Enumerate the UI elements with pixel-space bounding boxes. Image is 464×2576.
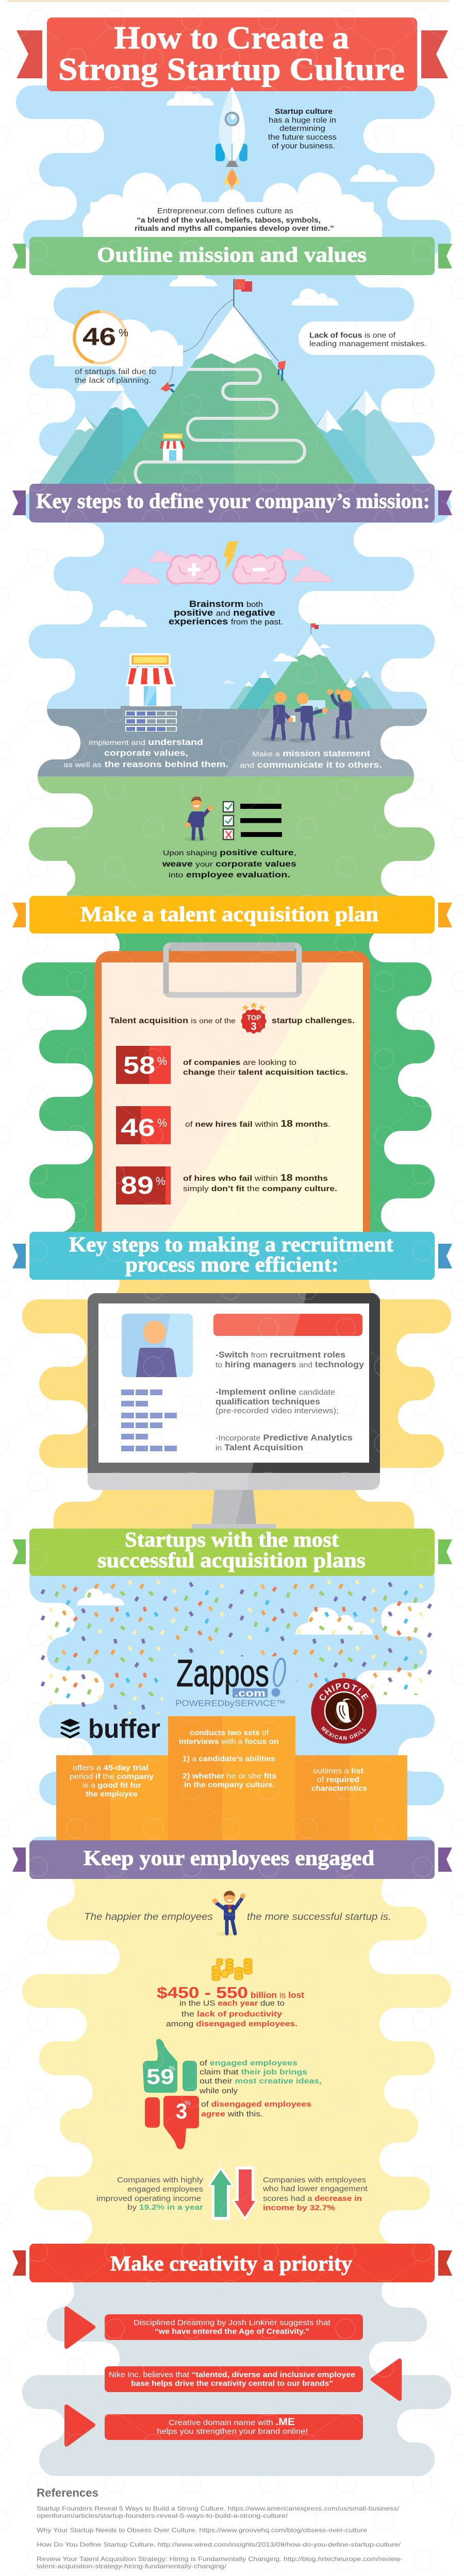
logo: Chipotle: MEXICAN GRILL bbox=[321, 1726, 366, 1740]
text: corporate values: corporate values, bbox=[104, 749, 188, 758]
panel: ground band bbox=[0, 709, 464, 793]
text: recruitment steps: -Implement online candidate bbox=[216, 1387, 335, 1397]
podium: buffer: the employee bbox=[86, 1790, 138, 1799]
callout: disciplined dreaming: “we have entered the Age of Creativity.” bbox=[155, 2327, 309, 2336]
text: employee evaluation: weave your corporate values bbox=[162, 860, 296, 869]
panel: key steps banner: Key steps to define your company’s mission: bbox=[36, 489, 430, 513]
podium: buffer bbox=[56, 1755, 168, 1843]
text: culture definition: Entrepreneur.com defines culture as bbox=[157, 207, 293, 215]
text: engaged employees bbox=[199, 2059, 322, 2095]
references heading: References bbox=[37, 2486, 98, 2499]
callout: disciplined dreaming: Disciplined Dreaming by Josh Linkner suggests that bbox=[134, 2318, 331, 2327]
text: startup culture role: determining bbox=[279, 124, 325, 133]
small clouds in sky bbox=[100, 89, 397, 627]
text: decrease in income: scores had a decrease in bbox=[263, 2194, 362, 2203]
panel: green talent background bbox=[0, 929, 464, 1232]
icon: thumbs up 59 percent: % bbox=[169, 2064, 175, 2072]
references list: talent-acquisition-strategy-hiring-fundamentally-changing/ bbox=[37, 2563, 227, 2570]
icon: thumbs down 3 percent bbox=[145, 2096, 199, 2149]
panel: cream engagement background bbox=[0, 1873, 464, 2246]
panel: outline mission banner: Outline mission and values bbox=[97, 243, 367, 266]
references list: Why Your Startup Needs to Obsess Over Culture. https://www.groovehq.com/blog/obsess-over-culture bbox=[37, 2527, 367, 2534]
clipboard clip bbox=[163, 942, 302, 995]
stat: 89 percent: % bbox=[156, 1175, 165, 1188]
text: engaged employees: of engaged employees bbox=[200, 2059, 297, 2067]
text: recruitment steps: in Talent Acquisition bbox=[216, 1443, 303, 1452]
podium: zappos: 2) whether he or she fits bbox=[183, 1772, 276, 1781]
text: mission statement: Make a mission statement bbox=[252, 749, 371, 758]
panel: talent banner bbox=[12, 896, 452, 934]
stat: billions lost: in the US each year due to bbox=[179, 1999, 285, 2008]
stat: 46 percent hires: % bbox=[157, 1116, 167, 1129]
stat: billions lost bbox=[157, 1984, 304, 2028]
arrow: third pointer bbox=[67, 2406, 93, 2445]
stat: billions lost: among disengaged employees. bbox=[166, 2020, 297, 2028]
stat: 58 percent: change their talent acquisition tactics. bbox=[183, 1068, 348, 1077]
clipboard frame bbox=[95, 951, 370, 1236]
stat: billions lost: $450 - 550 bbox=[157, 1984, 248, 2002]
text: culture definition: rituals and myths all companies develop over time.” bbox=[135, 225, 334, 233]
panel: sky background, intro to key steps bbox=[0, 86, 464, 726]
text: improved operating income bbox=[96, 2176, 204, 2212]
panel: engaged banner bbox=[12, 1840, 452, 1879]
chart: corporate values bars bbox=[125, 711, 177, 732]
text: recruitment steps: to hiring managers and technology bbox=[216, 1360, 364, 1369]
podium: zappos: in the company culture. bbox=[184, 1781, 275, 1789]
panel: creativity banner: Make creativity a priority bbox=[110, 2251, 353, 2275]
stat: 58 percent: 58 bbox=[123, 1052, 155, 1079]
text: mission statement bbox=[240, 749, 382, 770]
text: brainstorm: Brainstorm both bbox=[189, 599, 263, 609]
icon: summit flag bbox=[234, 279, 252, 307]
text: recruitment steps: qualification techniques bbox=[216, 1397, 320, 1406]
text: corporate values: as well as the reasons behind them. bbox=[63, 760, 228, 769]
callout: nike: Nike Inc. believes that “talented, diverse and inclusive employee bbox=[109, 2370, 355, 2379]
podium: zappos: conducts two sets of bbox=[190, 1729, 269, 1737]
text: brainstorm: experiences from the past. bbox=[169, 616, 283, 626]
callout: domain: helps you strengthen your brand online! bbox=[157, 2427, 308, 2436]
text: startup culture role: has a huge role in bbox=[269, 116, 336, 125]
logo: Zappos: POWEREDbySERVICE™ bbox=[175, 1698, 286, 1708]
logo: buffer: buffer bbox=[88, 1714, 160, 1744]
references list: openforum/articles/startup-founders-reveal-5-ways-to-build-a-strong-culture/ bbox=[37, 2512, 288, 2519]
title: Strong Startup Culture bbox=[58, 52, 405, 87]
icon: lightning bbox=[223, 541, 238, 571]
podium: buffer: offers a 45-day trial bbox=[73, 1764, 148, 1772]
logo: Chipotle bbox=[311, 1679, 376, 1743]
ribbon: title bbox=[16, 30, 448, 78]
podium: zappos: 1) a candidate’s abilities bbox=[183, 1755, 275, 1763]
illustration: mountains bbox=[38, 306, 432, 487]
stat: billions lost: billion is lost bbox=[251, 1990, 304, 2000]
text: mission statement: and communicate it to others. bbox=[240, 760, 382, 770]
podium: zappos: interviews with a focus on bbox=[179, 1738, 279, 1746]
callout: domain: Creative domain name with .ME bbox=[169, 2417, 295, 2428]
text: startup culture role: Startup culture bbox=[275, 107, 333, 116]
text: happier employees: The happier the employees bbox=[84, 1911, 213, 1923]
text: disengaged employees bbox=[201, 2100, 311, 2119]
icon: pink clouds bbox=[121, 548, 332, 584]
panel: key steps banner bbox=[12, 484, 452, 522]
panel: recruitment banner bbox=[12, 1232, 452, 1280]
panel: startups banner: Startups with the most bbox=[125, 1528, 339, 1551]
podium: chipotle: of required bbox=[317, 1776, 359, 1784]
panel: talent banner: Make a talent acquisition plan bbox=[80, 902, 378, 926]
text: decrease in income: who had lower engagement bbox=[262, 2184, 368, 2193]
text: recruitment steps: -Incorporate Predictive Analytics bbox=[216, 1433, 353, 1443]
icon: store with marquee bbox=[121, 653, 182, 709]
red name bar bbox=[213, 1314, 362, 1336]
podium: chipotle: characteristics bbox=[311, 1785, 367, 1793]
callout: domain bbox=[105, 2414, 363, 2440]
icon: thumbs up 59 percent bbox=[143, 2039, 197, 2093]
text: talent acquisition challenge: Talent acquisition is one of the bbox=[109, 1016, 236, 1025]
text: lack of focus: Lack of focus is one of bbox=[309, 331, 396, 340]
text: employee evaluation bbox=[162, 849, 296, 879]
text: recruitment steps: -Switch from recruitment roles bbox=[216, 1350, 345, 1360]
arrow: income down bbox=[233, 2167, 257, 2219]
text: recruitment steps: (pre-recorded video interviews); bbox=[216, 1406, 339, 1415]
icon: climbing rope and climber bbox=[234, 306, 286, 381]
text: fail due to planning: of startups fail due to bbox=[75, 367, 156, 376]
icon: coins bbox=[212, 1959, 252, 1980]
icon: top 3 badge bbox=[241, 1002, 267, 1034]
panel: sky startup background bbox=[0, 1561, 464, 1857]
text: fail due to planning: the lack of planning. bbox=[75, 376, 151, 385]
title banner bbox=[47, 18, 417, 91]
icon: negative brain bbox=[232, 554, 287, 585]
text: fail due to planning bbox=[75, 367, 156, 385]
text: decrease in income: Companies with employees bbox=[263, 2176, 366, 2184]
mountain road bbox=[136, 369, 305, 484]
panel: grey creativity background bbox=[0, 2274, 464, 2476]
illustration: monitor bbox=[88, 1293, 380, 1529]
stat: 89 percent: of hires who fail within 18 months bbox=[183, 1173, 328, 1183]
icon: falling rope and climber bbox=[160, 299, 234, 392]
text: brainstorm: positive and negative bbox=[174, 607, 275, 618]
text: improved operating income: improved operating income bbox=[96, 2194, 201, 2203]
text: engaged employees: while only bbox=[199, 2087, 238, 2095]
arrow: income up bbox=[208, 2167, 234, 2219]
logo: Zappos: Zappos bbox=[176, 1652, 269, 1694]
logo: Chipotle: CHIPOTLE bbox=[320, 1683, 369, 1701]
icon: positive brain bbox=[166, 554, 221, 585]
panel: recruitment banner: process more efficient: bbox=[125, 1252, 339, 1276]
stat: 89 percent bbox=[116, 1166, 337, 1205]
logo: Zappos bbox=[175, 1652, 287, 1708]
icon: top 3 badge: TOP bbox=[247, 1014, 261, 1022]
text: disengaged employees: agree with this. bbox=[201, 2110, 263, 2119]
chart: skill bars bbox=[121, 1389, 177, 1451]
panel: green evaluation band bbox=[0, 793, 464, 897]
panel: creativity banner bbox=[12, 2244, 452, 2282]
text: employee evaluation: Upon shaping positive culture , bbox=[163, 849, 296, 857]
callout: nike bbox=[105, 2366, 363, 2392]
stat: 46 percent hires: of new hires fail within 18 months . bbox=[185, 1118, 330, 1129]
panel: startups banner: successful acquisition plans bbox=[97, 1548, 366, 1572]
text: startup culture role: the future success bbox=[268, 133, 337, 142]
stat: 46 percent hires: 46 bbox=[121, 1114, 155, 1142]
panel: yellow recruitment background bbox=[0, 1266, 464, 1543]
illustration: small mountain range with flag bbox=[223, 623, 393, 709]
title bbox=[58, 21, 405, 87]
text: brainstorm bbox=[169, 599, 283, 626]
text: recruitment steps bbox=[216, 1350, 364, 1452]
icon: rocket bbox=[216, 87, 247, 218]
text: employee evaluation: into employee evaluation. bbox=[169, 871, 290, 879]
podium: chipotle: outlines a list bbox=[313, 1767, 363, 1775]
top rule bbox=[7, 1, 449, 2]
text: culture definition: “a blend of the values, beliefs, taboos, symbols, bbox=[137, 216, 321, 225]
text: improved operating income: by 19.2% in a year bbox=[127, 2203, 203, 2212]
text: startup culture role: of your business. bbox=[272, 142, 335, 150]
stat: billions lost: the lack of productivity bbox=[181, 2010, 283, 2019]
stat: 46 percent ring: 46 bbox=[82, 324, 116, 351]
panel: outline mission banner bbox=[12, 237, 452, 275]
large launch cloud bbox=[82, 173, 383, 243]
text: corporate values: Implement and understand bbox=[89, 738, 203, 747]
icon: candidate profile photo bbox=[122, 1314, 193, 1377]
text: decrease in income: income by 32.7% bbox=[263, 2204, 335, 2212]
podium: zappos bbox=[168, 1716, 295, 1843]
stat: 46 percent hires bbox=[116, 1106, 330, 1144]
callout: nike: base helps drive the creativity central to our brands” bbox=[131, 2379, 333, 2388]
icon: small store bbox=[161, 434, 185, 461]
icon: top 3 badge: 3 bbox=[251, 1021, 257, 1032]
podium: buffer: period if the company bbox=[70, 1773, 154, 1781]
references list: Startup Founders Reveal 5 Ways to Build a Strong Culture. https://www.americanexpress.com/us/small-business/ bbox=[37, 2505, 400, 2512]
stat: 89 percent: simply don’t fit the company culture. bbox=[183, 1184, 337, 1193]
text: corporate values bbox=[63, 738, 228, 769]
text: happier employees: the more successful startup is. bbox=[247, 1911, 391, 1923]
arrow: first pointer bbox=[67, 2309, 93, 2347]
stat: 46 percent ring: % bbox=[119, 327, 128, 339]
stat: 58 percent: % bbox=[157, 1055, 167, 1067]
illustration: person with evaluation checklist bbox=[184, 796, 213, 841]
logo: Zappos: .com bbox=[235, 1688, 266, 1699]
text: improved operating income: engaged employees bbox=[127, 2185, 203, 2194]
text: startup culture role bbox=[268, 107, 337, 150]
confetti bbox=[41, 1580, 433, 1714]
stat: 89 percent: 89 bbox=[121, 1172, 154, 1199]
stat: 58 percent bbox=[116, 1046, 348, 1084]
title: How to Create a bbox=[114, 21, 349, 56]
podium: chipotle bbox=[295, 1755, 407, 1843]
illustration: team looking at map bbox=[262, 689, 354, 743]
panel: engaged banner: Keep your employees engaged bbox=[84, 1846, 374, 1870]
logo: buffer bbox=[60, 1714, 160, 1744]
text: talent acquisition challenge bbox=[109, 1016, 355, 1025]
references list: Review Your Talent Acquisition Strategy: Hiring is Fundamentally Changing. http://blog.hrtecheurope.com/review- bbox=[37, 2555, 403, 2563]
text: talent acquisition challenge: startup challenges. bbox=[272, 1016, 355, 1025]
references list: How Do You Define Startup Culture. http://www.wired.com/insights/2013/09/how-do-you-define-startup-culture/ bbox=[37, 2541, 401, 2548]
panel: recruitment banner: Key steps to making a recruitment bbox=[69, 1232, 393, 1256]
illustration: happy employee with medal bbox=[212, 1891, 245, 1936]
text: decrease in income bbox=[262, 2176, 368, 2212]
icon: thumbs down 3 percent: 3 bbox=[176, 2099, 187, 2123]
text: disengaged employees: of disengaged employees bbox=[201, 2100, 311, 2109]
podium: buffer: is a good fit for bbox=[82, 1782, 141, 1790]
references list bbox=[37, 2505, 424, 2576]
stat: 46 percent ring bbox=[74, 312, 128, 363]
text: lack of focus bbox=[309, 331, 427, 348]
panel: startups banner bbox=[12, 1528, 452, 1576]
text: happier employees bbox=[84, 1911, 391, 1923]
text: engaged employees: claim that their job brings bbox=[200, 2068, 307, 2076]
icon: thumbs up 59 percent: 59 bbox=[146, 2064, 174, 2089]
icon: checklist bbox=[223, 802, 282, 840]
text: lack of focus: leading management mistakes. bbox=[309, 340, 427, 348]
text: culture definition bbox=[135, 207, 334, 233]
text: improved operating income: Companies with highly bbox=[117, 2176, 204, 2184]
arrow: second pointer bbox=[373, 2361, 400, 2399]
46% cloud bbox=[54, 311, 183, 391]
callout: disciplined dreaming bbox=[105, 2314, 363, 2340]
text: engaged employees: out their most creative ideas, bbox=[200, 2077, 322, 2086]
icon: thumbs down 3 percent: % bbox=[185, 2099, 191, 2107]
stat: 58 percent: of companies are looking to bbox=[183, 1058, 296, 1067]
